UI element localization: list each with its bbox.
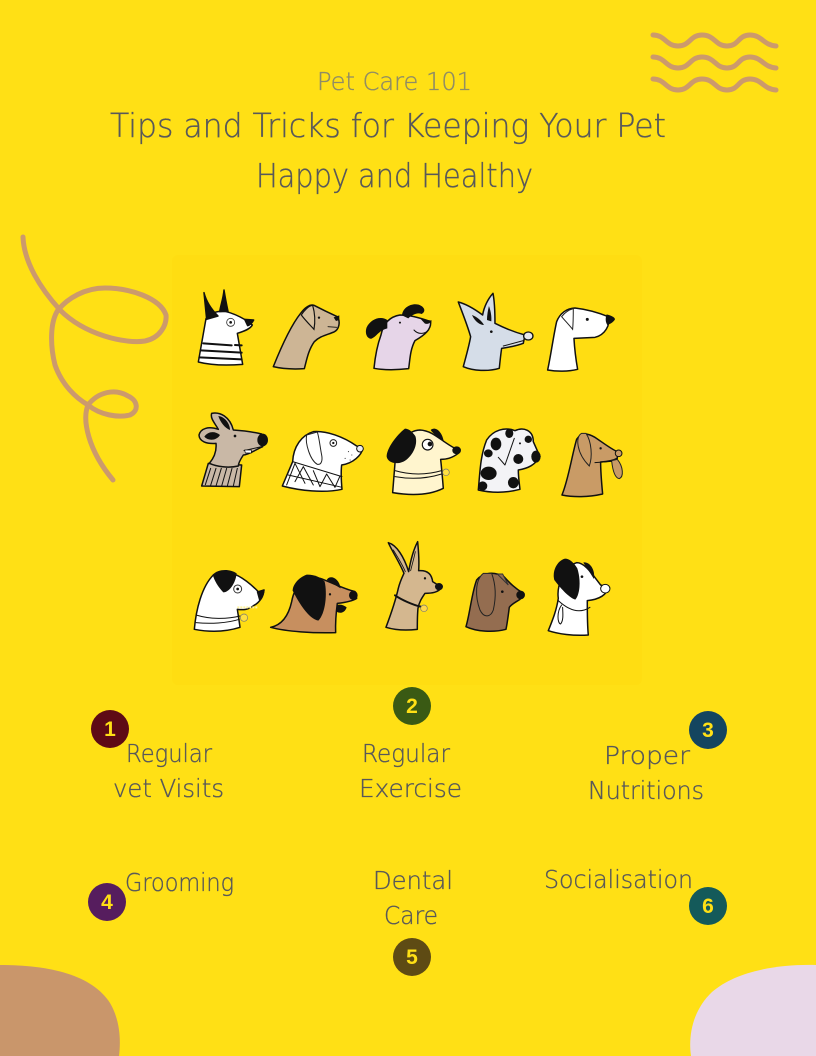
dog 3: pink <box>366 304 432 370</box>
dog 10: brown with tongue <box>562 433 622 497</box>
tip 3: proper nutritions: Proper <box>604 741 691 770</box>
title: Tips and Tricks for Keeping Your Pet <box>110 106 666 145</box>
tip 4: grooming <box>88 868 234 921</box>
tip 6: socialisation: 6 <box>702 895 714 918</box>
blob: bottom left brown <box>0 965 120 1056</box>
tip 3: proper nutritions: 3 <box>702 719 714 742</box>
row 2 of dogs <box>199 413 622 497</box>
tip 3: proper nutritions <box>588 711 727 805</box>
dog 8: cream <box>387 429 461 495</box>
tip 5: dental care: 5 <box>406 946 418 969</box>
dog 12: orange-brown <box>271 575 358 633</box>
tip 5: dental care: Care <box>384 901 438 930</box>
decoration: curly line left <box>23 237 166 480</box>
title: Happy and Healthy <box>256 156 533 195</box>
row 3 of dogs <box>194 542 610 635</box>
tip 4: grooming: 4 <box>101 891 113 914</box>
tip 1: regular vet visits <box>91 710 224 803</box>
tip 2: regular exercise: Regular <box>362 739 451 768</box>
dog 11: white black patch <box>194 570 265 631</box>
dog 6: sweater <box>199 413 268 487</box>
tip 6: socialisation: Socialisation <box>544 865 693 894</box>
dog 4: blue-grey <box>458 293 533 370</box>
tip 2: regular exercise <box>359 687 462 803</box>
subtitle: Pet Care 101 <box>317 67 472 96</box>
dog 7: patterned <box>282 432 363 491</box>
tip 6: socialisation <box>544 865 727 925</box>
tip 1: regular vet visits: 1 <box>104 718 116 741</box>
dog 13: long ears <box>386 542 443 630</box>
blob: bottom right lilac <box>690 965 816 1056</box>
dog 14: dark brown <box>466 573 525 631</box>
decoration: waves top right <box>653 35 776 90</box>
dog 5: white <box>548 308 615 371</box>
tip 5: dental care <box>373 866 453 976</box>
row 1 of dogs <box>198 290 615 371</box>
dog 15: white black ears <box>548 559 610 635</box>
dog 1: striped <box>198 290 254 365</box>
tip 1: regular vet visits: Regular <box>126 739 213 768</box>
tip 2: regular exercise: Exercise <box>359 774 462 803</box>
tip 1: regular vet visits: vet Visits <box>113 774 224 803</box>
tip 4: grooming: Grooming <box>125 868 234 897</box>
panel: dog illustration <box>172 255 642 685</box>
title <box>110 106 666 195</box>
tip 5: dental care: Dental <box>373 866 453 895</box>
tip 3: proper nutritions: Nutritions <box>588 776 704 805</box>
tip 2: regular exercise: 2 <box>406 695 418 718</box>
dog 2: tan <box>273 305 339 369</box>
dog 9: dalmatian <box>478 429 541 492</box>
